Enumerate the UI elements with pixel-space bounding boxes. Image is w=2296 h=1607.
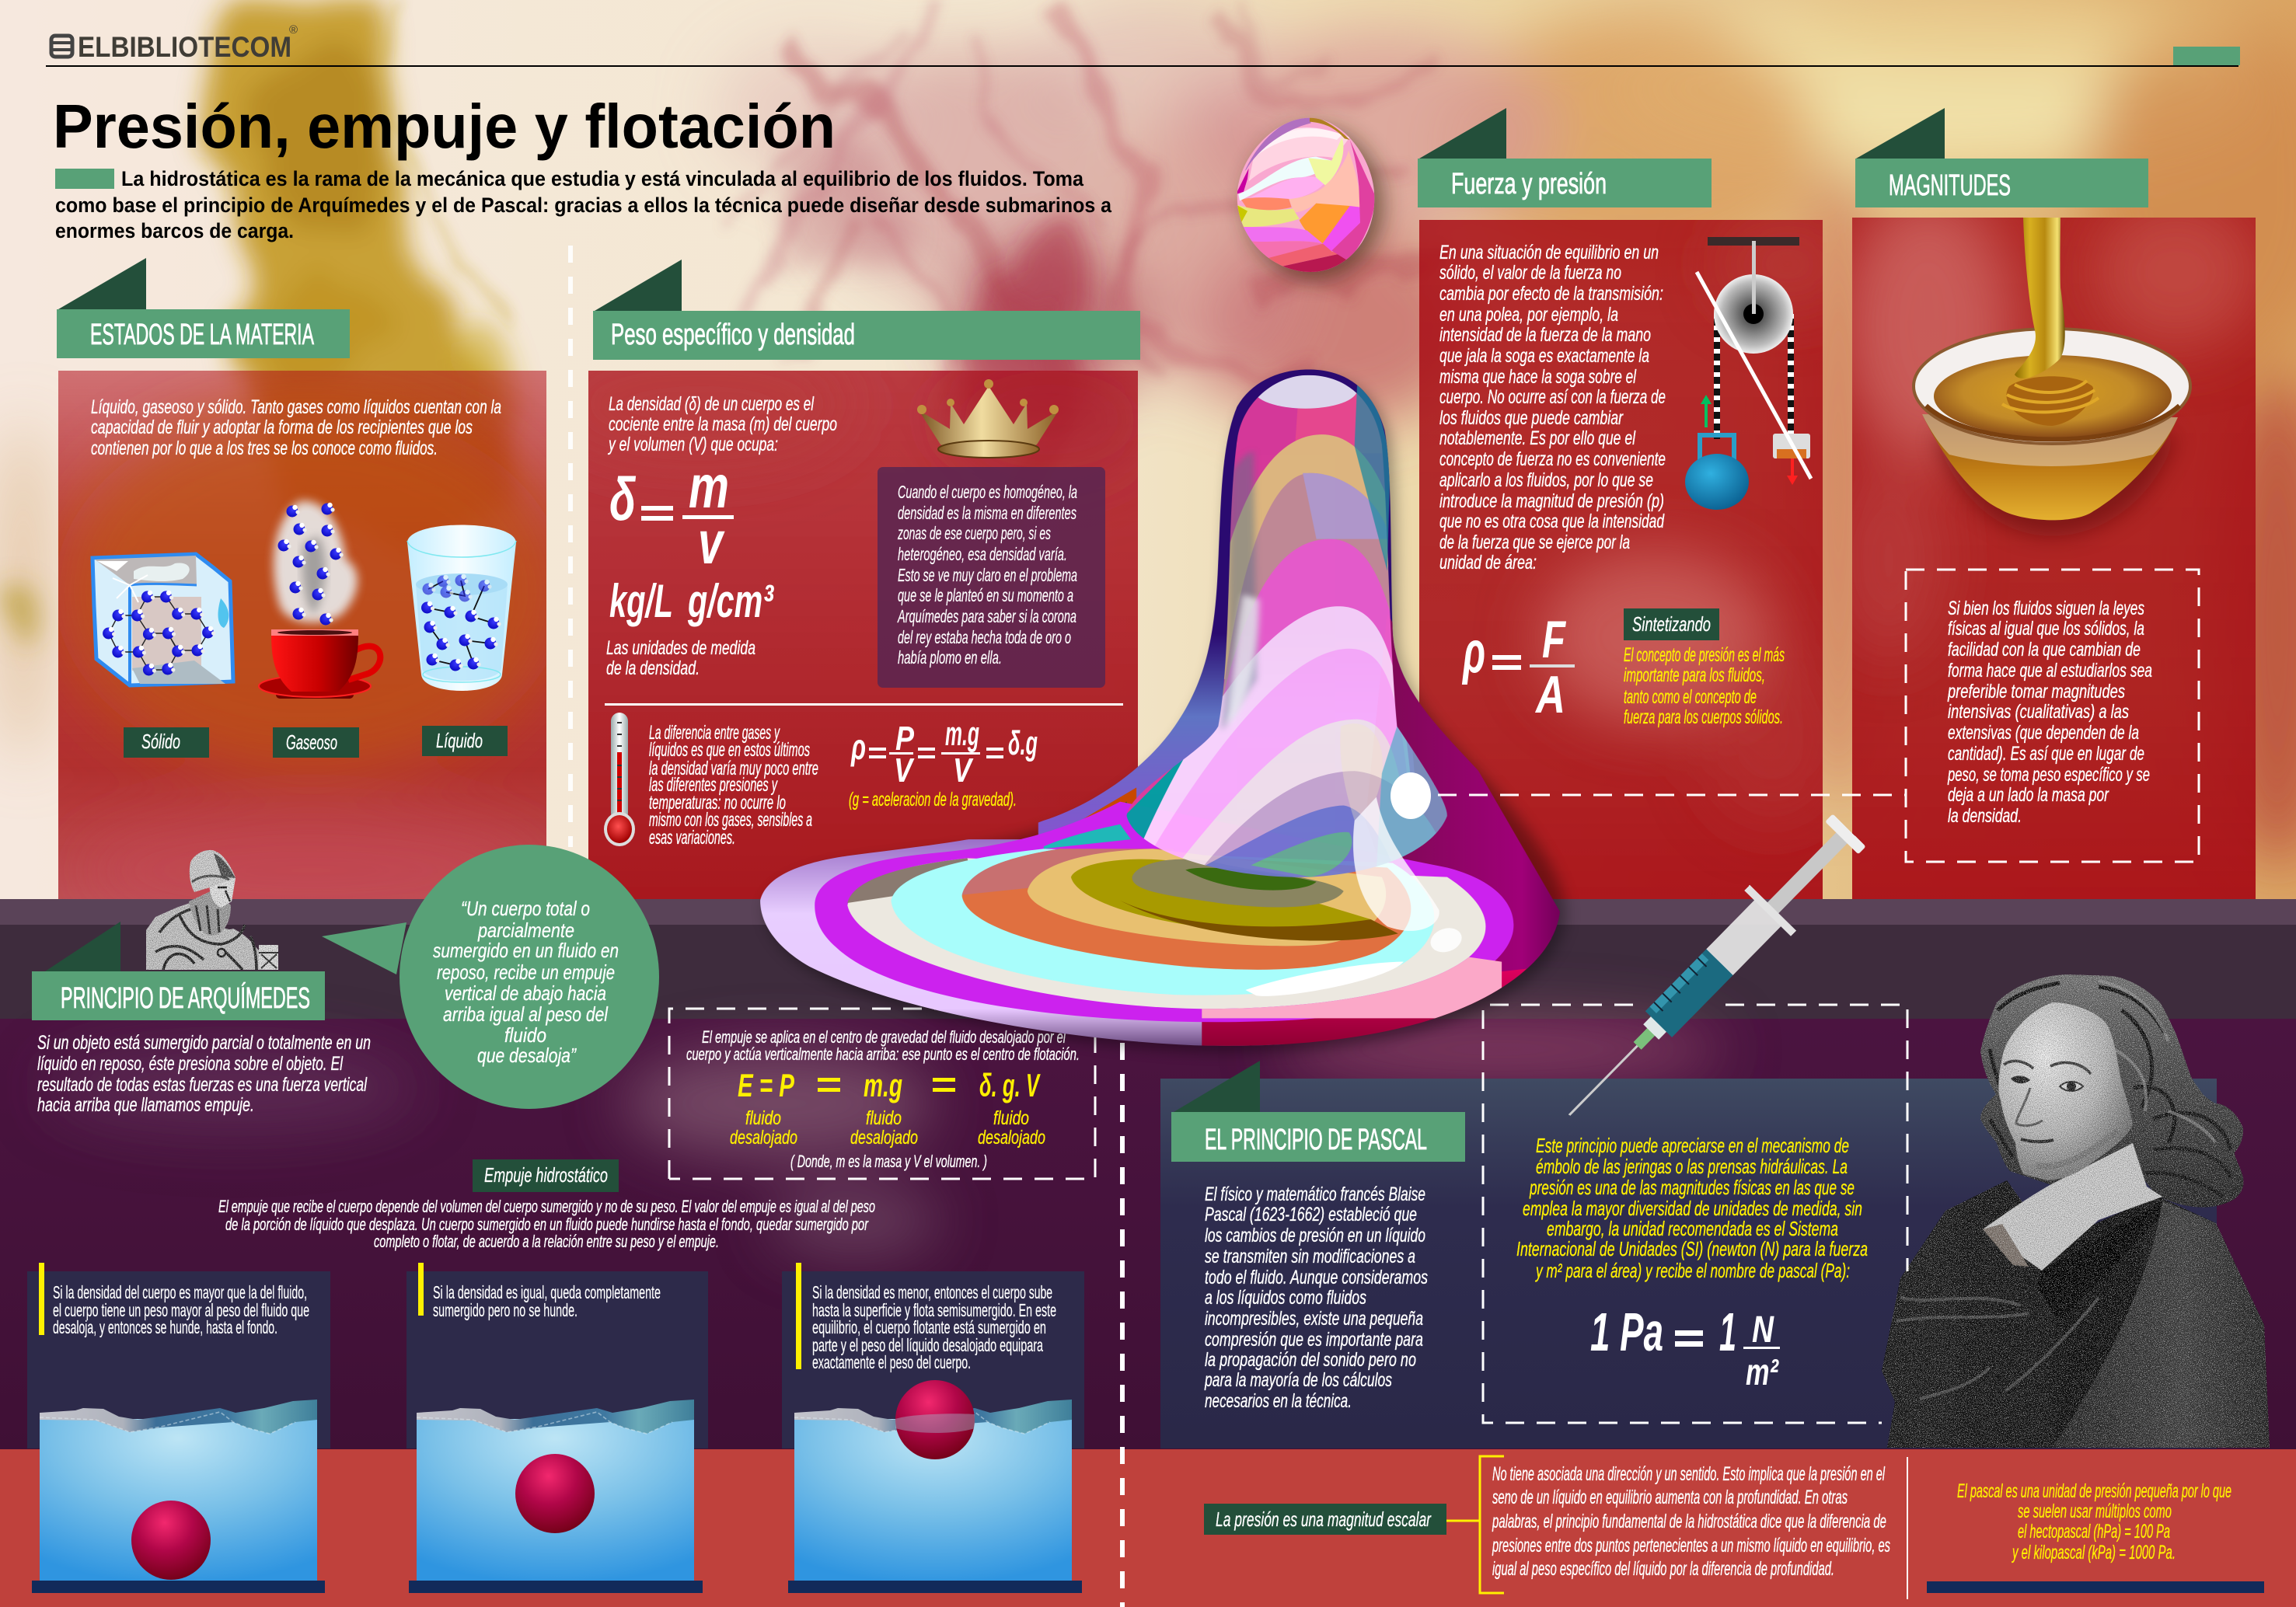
icon: red cup <box>259 629 380 699</box>
tank: sunken ball <box>32 1400 325 1593</box>
heading: principio de pascal: EL PRINCIPIO DE PASCAL <box>1205 1124 1427 1156</box>
callout: homogeneous body: zonas de ese cuerpo pero, si es <box>897 523 1051 543</box>
card: sinks: Si la densidad del cuerpo es mayor que la del fluido, <box>53 1282 307 1302</box>
callout: centro de flotacion formula: ( Donde, m es la masa y V el volumen. ) <box>790 1152 987 1171</box>
intro block: como base el principio de Arquímedes y el de Pascal: gracias a ellos la técnica puede diseñar desde submarinos a <box>55 193 1112 217</box>
callout: centro de flotacion formula: fluido <box>745 1107 781 1129</box>
card: floats: exactamente el peso del cuerpo. <box>812 1352 971 1372</box>
text: gases and liquids: la densidad varía muy poco entre <box>649 758 818 779</box>
callout: magnitudes text: Si bien los fluidos siguen la leyes <box>1948 598 2144 619</box>
callout: centro de flotacion formula: El empuje se aplica en el centro de gravedad del fluido desalojado por el <box>702 1027 1066 1047</box>
bracket: yellow connector <box>1446 1456 1504 1593</box>
callout: magnitudes text: preferible tomar magnitudes <box>1947 681 2125 702</box>
speech bubble <box>322 845 659 1109</box>
card: sinks: desaloja, y entonces se hunde, hasta el fondo. <box>53 1317 277 1337</box>
panel: magnitudes <box>1834 108 2262 899</box>
intro block: La hidrostática es la rama de la mecánica que estudia y está vinculada al equilibrio de los fluidos. Toma <box>121 167 1084 190</box>
formula: pascal unit: N <box>1752 1309 1774 1351</box>
text: empuje: de la porción de líquido que desplaza. Un cuerpo sumergido en un fluido puede hundirse hasta el fondo, quedar sumergido por <box>225 1215 869 1234</box>
text: pascal multiples: se suelen usar múltiplos como <box>2018 1501 2172 1522</box>
card: stays submerged: Si la densidad es igual, queda completamente <box>433 1282 661 1302</box>
text: fuerza: que no es otra cosa que la intensidad <box>1439 511 1665 532</box>
card: floats: hasta la superficie y flota semisumergido. En este <box>812 1300 1056 1320</box>
callout: magnitudes text <box>1906 570 2199 862</box>
header rule <box>46 65 2238 67</box>
formula: pressure density: V <box>953 751 974 790</box>
card: stays submerged: sumergido pero no se hunde. <box>433 1300 577 1320</box>
icon: honey bowl <box>1914 218 2190 536</box>
text: gases and liquids: temperaturas: no ocurre lo <box>649 792 786 814</box>
callout: pascal application: y m² para el área) y recibe el nombre de pascal (Pa): <box>1535 1259 1850 1282</box>
callout: homogeneous body: del rey estaba hecha toda de oro o <box>898 627 1071 647</box>
heading: principio de pascal <box>1171 1061 1465 1162</box>
callout: pascal application: embargo, la unidad recomendada es el Sistema <box>1547 1217 1838 1240</box>
speech bubble: sumergido en un fluido en <box>433 939 619 962</box>
text: pascal <box>1204 1183 1428 1412</box>
illustration: fluid blob <box>738 364 1589 1052</box>
callout: centro de flotacion formula: E = P <box>738 1067 795 1103</box>
callout: centro de flotacion formula: fluido <box>993 1107 1029 1129</box>
text: fuerza: intensidad de la fuerza de la mano <box>1439 324 1651 346</box>
callout: centro de flotacion formula: desalojado <box>978 1127 1045 1149</box>
formula: pressure density: m.g <box>945 715 979 753</box>
card: floats: equilibrio, el cuerpo flotante está sumergido en <box>812 1317 1046 1337</box>
icon: crown <box>917 379 1059 458</box>
heading: magnitudes <box>1855 108 2148 207</box>
brand logo: ELBIBLIOTECOM <box>78 31 291 63</box>
background: cream paper with ink smoke <box>0 0 2296 901</box>
text: pascal: compresión que es importante para <box>1205 1329 1423 1351</box>
callout: centro de flotacion formula: cuerpo y actúa verticalmente hacia arriba: ese punto es el centro de flotación. <box>686 1044 1080 1064</box>
label: empuje hidrostatico: Empuje hidrostático <box>484 1163 608 1187</box>
text: pascal: Pascal (1623-1662) estableció que <box>1205 1204 1417 1225</box>
text: sintetizando: tanto como el concepto de <box>1624 686 1757 708</box>
connector: dashed line to magnitudes <box>1438 794 1906 796</box>
text: pascal: los cambios de presión en un líquido <box>1205 1225 1425 1246</box>
card: floats <box>782 1263 1084 1593</box>
heading: estados de la materia: ESTADOS DE LA MATERIA <box>90 319 314 351</box>
text: fuerza <box>1439 242 1666 573</box>
text: densidad definition: y el volumen (V) que ocupa: <box>608 434 778 455</box>
icon: ice cube solid <box>92 554 233 685</box>
callout: homogeneous body: que se le planteó en su momento a <box>898 585 1073 605</box>
text: pascal: la propagación del sonido pero no <box>1205 1349 1416 1371</box>
formula: density: δ <box>609 465 636 533</box>
heading: principio de arquimedes: PRINCIPIO DE ARQUÍMEDES <box>61 981 310 1015</box>
text: magnitud escalar: igual al peso específico del líquido por la diferencia de profundidad. <box>1492 1558 1834 1580</box>
text: arquimedes: líquido en reposo, éste presiona sobre el objeto. El <box>37 1053 344 1075</box>
title: Presión, empuje y flotación <box>53 92 836 161</box>
label: gaseoso <box>273 727 359 758</box>
text: pascal: incompresibles, existe una pequeña <box>1205 1308 1423 1330</box>
icon: thermometer <box>604 713 635 846</box>
label: liquido <box>422 726 508 756</box>
label: magnitud escalar: La presión es una magnitud escalar <box>1216 1508 1432 1531</box>
callout: homogeneous body: densidad es la misma en diferentes <box>898 503 1076 523</box>
card: floats: parte y el peso del líquido desalojado equipara <box>812 1335 1043 1355</box>
panel: fuerza y presion <box>1418 108 1858 899</box>
heading: principio de arquimedes <box>32 922 325 1020</box>
callout: pascal application: Internacional de Unidades (SI) (newton (N) para la fuerza <box>1516 1237 1868 1260</box>
callout: pascal application: Este principio puede apreciarse en el mecanismo de <box>1536 1134 1849 1157</box>
text: fuerza: en una polea, por ejemplo, la <box>1439 304 1618 326</box>
text: estados: capacidad de fluir y adoptar la forma de los recipientes que los <box>91 417 473 438</box>
text: fuerza: de la fuerza que se ejerce por la <box>1439 532 1630 553</box>
units: g/cm³ <box>687 575 774 627</box>
callout: pascal application: emplea la mayor diversidad de unidades de medida, sin <box>1523 1197 1862 1220</box>
formula: density: v <box>698 508 725 577</box>
text: pascal: a los líquidos como fluidos <box>1205 1287 1366 1309</box>
text: fuerza: En una situación de equilibrio en un <box>1439 242 1659 263</box>
text: estados: Líquido, gaseoso y sólido. Tanto gases como líquidos cuentan con la <box>91 396 501 418</box>
callout: homogeneous body: heterogéneo, esa densidad varía. <box>898 544 1067 564</box>
text: empuje: El empuje que recibe el cuerpo depende del volumen del cuerpo sumergido y no de su peso. El valor del empuje es igual al del peso <box>218 1197 875 1216</box>
text: estados: contienen por lo que a los tres se los conoce como fluidos. <box>91 437 438 459</box>
units: kg/L <box>609 575 673 627</box>
units: Las unidades de medida <box>606 637 755 659</box>
portrait: blaise pascal <box>1882 974 2270 1448</box>
label: magnitud escalar <box>1204 1504 1446 1535</box>
intro block <box>55 167 1112 242</box>
text: arquimedes <box>37 1032 371 1116</box>
speech bubble: parcialmente <box>477 919 574 942</box>
text: pascal multiples: el hectopascal (hPa) = 100 Pa <box>2018 1521 2170 1543</box>
text: fuerza: notablemente. Es por ello que el <box>1439 427 1636 449</box>
card: sinks <box>27 1263 330 1593</box>
text: sintetizando: fuerza para los cuerpos sólidos. <box>1624 706 1783 728</box>
callout: pascal application <box>1483 1005 1907 1423</box>
text: pascal multiples <box>1957 1480 2231 1563</box>
page marker <box>2173 47 2240 65</box>
formula: p = F/A <box>1462 610 1575 724</box>
text: sintetizando <box>1624 644 1785 728</box>
callout: homogeneous body: Cuando el cuerpo es homogéneo, la <box>898 482 1077 502</box>
formula: pascal unit: m² <box>1746 1352 1779 1393</box>
units <box>606 575 774 679</box>
text: fuerza: cambia por efecto de la transmisión: <box>1439 283 1663 305</box>
text: fuerza: concepto de fuerza no es conveniente <box>1439 448 1666 470</box>
icon: colored egg <box>1233 114 1384 280</box>
note: gravity: (g = aceleracion de la gravedad). <box>849 789 1017 810</box>
formula: pressure density <box>850 715 1038 790</box>
label: sintetizando: Sintetizando <box>1632 612 1711 636</box>
intro block: enormes barcos de carga. <box>55 219 294 242</box>
callout: magnitudes text: cantidad). Es así que en lugar de <box>1948 743 2144 765</box>
icon: steam molecules gas <box>274 501 358 625</box>
text: sintetizando: El concepto de presión es el más <box>1624 644 1785 666</box>
formula: p = F/A: ρ <box>1462 619 1485 685</box>
callout: pascal application: presión es una de las magnitudes físicas en las que se <box>1529 1176 1855 1199</box>
callout: magnitudes text: facilidad con la que cambian de <box>1948 639 2141 661</box>
text: fuerza: cuerpo. No ocurre así con la fuerza de <box>1439 386 1666 408</box>
text: magnitud escalar: presiones entre dos puntos pertenecientes a un mismo líquido en equilibrio, es <box>1492 1535 1890 1556</box>
formula: density: m <box>689 452 729 521</box>
connector dot <box>1391 772 1431 819</box>
band: lower dark purple background <box>0 1018 2296 1450</box>
text: empuje: completo o flotar, de acuerdo a la relación entre su peso y el empuje. <box>374 1232 719 1251</box>
callout: magnitudes text: extensivas (que dependen de la <box>1948 722 2139 744</box>
text: fuerza: aplicarlo a los fluidos, por lo que se <box>1439 469 1653 491</box>
text: fuerza: sólido, el valor de la fuerza no <box>1439 262 1621 284</box>
callout: centro de flotacion formula: desalojado <box>730 1127 797 1149</box>
text: fuerza: que jala la soga es exactamente la <box>1439 345 1649 367</box>
heading: fuerza y presion: Fuerza y presión <box>1451 168 1607 200</box>
tank: floating ball <box>788 1380 1082 1593</box>
formula: pascal unit <box>1590 1302 1780 1393</box>
heading: fuerza y presion <box>1418 108 1712 207</box>
text: arquimedes: hacia arriba que llamamos empuje. <box>37 1094 254 1116</box>
formula: density <box>609 452 734 577</box>
text: magnitud escalar: No tiene asociada una dirección y un sentido. Esto implica que la presión en el <box>1492 1463 1886 1485</box>
band: dark grey purple strip <box>0 925 2296 1020</box>
speech bubble: reposo, recibe un empuje <box>437 960 615 984</box>
speech bubble: fluido <box>504 1023 546 1047</box>
label: sintetizando <box>1624 608 1719 640</box>
icon: syringe <box>1546 807 1872 1138</box>
band: bottom red strip <box>0 1449 2296 1607</box>
formula: p = F/A: F <box>1542 610 1566 669</box>
heading: magnitudes: MAGNITUDES <box>1889 169 2011 202</box>
label: liquido: Líquido <box>436 729 483 752</box>
label: gaseoso: Gaseoso <box>286 730 337 754</box>
brand logo <box>51 23 298 63</box>
speech bubble: que desaloja” <box>477 1044 577 1067</box>
band: upper purple grey strip <box>0 899 2296 926</box>
text: fuerza: los fluidos que puede cambiar <box>1439 407 1624 429</box>
heading: estados de la materia <box>57 258 350 358</box>
speech bubble: “Un cuerpo total o <box>461 897 590 920</box>
callout: homogeneous body: Esto se ve muy claro en el problema <box>898 565 1077 585</box>
panel: peso especifico y densidad <box>544 260 1158 899</box>
text: pascal: todo el fluido. Aunque consideramos <box>1205 1267 1428 1288</box>
heading: peso especifico: Peso específico y densidad <box>611 319 855 351</box>
text: fuerza: introduce la magnitud de presión (p) <box>1439 490 1664 512</box>
text: gases and liquids <box>649 722 818 849</box>
brand logo: ® <box>289 23 298 37</box>
callout: magnitudes text: deja a un lado la masa por <box>1948 784 2109 806</box>
card: stays submerged <box>407 1263 708 1593</box>
card: floats: Si la densidad es menor, entonces el cuerpo sube <box>812 1282 1052 1302</box>
text: magnitud escalar: palabras, el principio fundamental de la hidrostática dice que la diferencia de <box>1492 1511 1886 1532</box>
callout: pascal application: émbolo de las jeringas o las prensas hidráulicas. La <box>1536 1155 1848 1178</box>
text: gases and liquids: La diferencia entre gases y <box>649 722 780 744</box>
formula: pascal unit: 1 Pa <box>1590 1302 1663 1362</box>
callout: magnitudes text: intensivas (cualitativas) a las <box>1948 701 2129 723</box>
text: magnitud escalar: seno de un líquido en equilibrio aumenta con la profundidad. En otras <box>1492 1487 1848 1508</box>
text: gases and liquids: las diferentes presiones y <box>649 774 778 796</box>
text: densidad definition: La densidad (δ) de un cuerpo es el <box>609 393 815 415</box>
speech bubble: vertical de abajo hacia <box>445 981 606 1005</box>
units: de la densidad. <box>606 657 700 679</box>
icon: glass of water <box>407 525 516 691</box>
text: pascal: El físico y matemático francés Blaise <box>1205 1183 1425 1205</box>
callout: centro de flotacion formula: m.g <box>864 1067 902 1103</box>
icon: archimedes portrait <box>146 850 278 970</box>
callout: centro de flotacion formula <box>669 1009 1095 1179</box>
panel: estados de la materia <box>54 258 567 925</box>
heading: peso especifico <box>593 260 1140 360</box>
text: arquimedes: resultado de todas estas fuerzas es una fuerza vertical <box>37 1074 368 1096</box>
text: arquimedes: Si un objeto está sumergido parcial o totalmente en un <box>37 1032 371 1054</box>
text: fuerza: unidad de área: <box>1439 552 1537 573</box>
callout: magnitudes text: físicas al igual que los sólidos, la <box>1948 618 2144 640</box>
text: pascal: necesarios en la técnica. <box>1205 1390 1352 1412</box>
text: pascal: se transmiten sin modificaciones a <box>1205 1246 1415 1267</box>
card: sinks: el cuerpo tiene un peso mayor al peso del fluido que <box>53 1300 309 1320</box>
panel: principio de arquimedes <box>32 845 1095 1251</box>
text: densidad definition <box>608 393 837 455</box>
callout: centro de flotacion formula: fluido <box>866 1107 902 1129</box>
speech bubble: arriba igual al peso del <box>443 1002 609 1026</box>
text: pascal multiples: y el kilopascal (kPa) = 1000 Pa. <box>2012 1542 2176 1563</box>
icon: pulley <box>1685 237 1811 510</box>
text: gases and liquids: líquidos es que en estos últimos <box>649 739 810 761</box>
text: sintetizando: importante para los fluidos, <box>1624 664 1765 686</box>
label: solido: Sólido <box>141 730 180 753</box>
label: solido <box>124 727 209 758</box>
callout: magnitudes text: forma hace que al estudiarlos sea <box>1948 660 2152 681</box>
callout: homogeneous body <box>878 467 1105 688</box>
text: pascal: para la mayoría de los cálculos <box>1204 1369 1392 1391</box>
text: densidad definition: cociente entre la masa (m) del cuerpo <box>609 413 837 435</box>
text: estados <box>91 396 501 459</box>
formula: p = F/A: A <box>1534 665 1565 724</box>
text: fuerza: misma que hace la soga sobre el <box>1439 366 1637 388</box>
text: gases and liquids: esas variaciones. <box>649 827 735 849</box>
panel: el principio de pascal <box>1160 1061 2217 1448</box>
tank: submerged ball <box>409 1400 703 1593</box>
formula: pressure density: V <box>894 751 915 790</box>
callout: centro de flotacion formula: δ. g. V <box>979 1067 1041 1103</box>
label: empuje hidrostatico <box>473 1159 619 1192</box>
formula: pressure density: P <box>895 720 915 758</box>
callout: homogeneous body: Arquímedes para saber si la corona <box>897 606 1076 626</box>
bar: bottom blue rule <box>1927 1581 2264 1593</box>
formula: pascal unit: 1 <box>1719 1302 1736 1362</box>
text: empuje <box>218 1197 875 1251</box>
text: magnitud escalar <box>1492 1463 1890 1580</box>
callout: magnitudes text: la densidad. <box>1948 805 2022 827</box>
text: gases and liquids: mismo con los gases, sensibles a <box>649 809 812 831</box>
callout: homogeneous body: había plomo en ella. <box>898 647 1002 668</box>
formula: pressure density: δ.g <box>1008 724 1038 762</box>
callout: magnitudes text: peso, se toma peso específico y se <box>1947 764 2150 786</box>
formula: pressure density: ρ <box>850 727 866 767</box>
callout: centro de flotacion formula: desalojado <box>850 1127 918 1149</box>
